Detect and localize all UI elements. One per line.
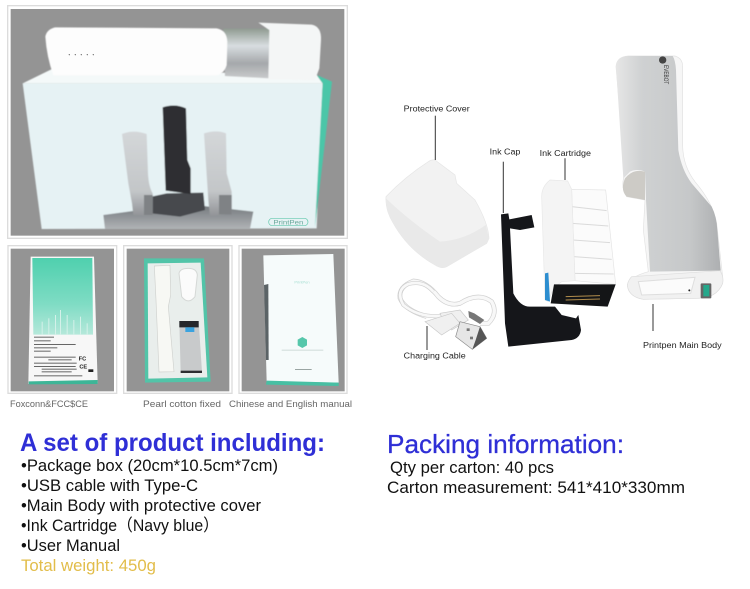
part: ink cap: Ink Cap (490, 148, 521, 157)
heading: a set of product including: A set of product including: (20, 429, 325, 457)
part: ink cartridge (540, 149, 616, 307)
list: product set contents: •Package box (20cm*10.5cm*7cm) (21, 456, 278, 475)
panel: pearl cotton tray (124, 246, 232, 393)
panel: package box photo (8, 6, 347, 238)
compliance marks: FC (79, 357, 86, 363)
text: quantity per carton: Qty per carton: 40 pcs (390, 458, 554, 477)
compliance marks (79, 357, 93, 372)
caption: manual: Chinese and English manual (229, 399, 352, 410)
caption: pearl cotton fixed: Pearl cotton fixed (143, 399, 221, 410)
total weight: Total weight: 450g (21, 556, 156, 575)
part: protective cover: Protective Cover (404, 104, 470, 113)
fine print lines (34, 337, 82, 376)
printpen device on box (45, 23, 321, 80)
list: product set contents (21, 456, 278, 555)
indicator dots (69, 54, 94, 55)
diagram: product parts (386, 56, 723, 361)
part: ink cartridge: Ink Cartridge (540, 149, 592, 158)
list: product set contents: •Ink Cartridge（Navy blue） (21, 516, 219, 535)
part: ink cap (490, 148, 581, 347)
caption: Foxconn and FCC CE: Foxconn&FCC$CE (10, 399, 88, 410)
part: printpen main body (616, 56, 723, 350)
compliance marks: CE (79, 364, 87, 370)
product box (23, 68, 332, 229)
panel: user manual (239, 246, 347, 393)
text: carton measurement: Carton measurement: 541*410*330mm (387, 478, 685, 497)
list: product set contents: •User Manual (21, 536, 120, 555)
part: charging cable: Charging Cable (404, 352, 466, 361)
list: product set contents: •USB cable with Type-C (21, 476, 198, 495)
panel: user manual: PrintPen (294, 279, 310, 284)
panel: certification label (8, 246, 117, 393)
part: printpen main body: Printpen Main Body (643, 341, 722, 350)
printpen logo on box: PrintPen (273, 219, 304, 226)
heading: packing information: Packing information: (387, 429, 624, 459)
part: charging cable (400, 281, 494, 361)
printpen logo on box (269, 218, 308, 226)
list: product set contents: •Main Body with protective cover (21, 496, 261, 515)
part: protective cover (386, 104, 489, 268)
part: printpen main body: EVEBOT (662, 65, 668, 85)
